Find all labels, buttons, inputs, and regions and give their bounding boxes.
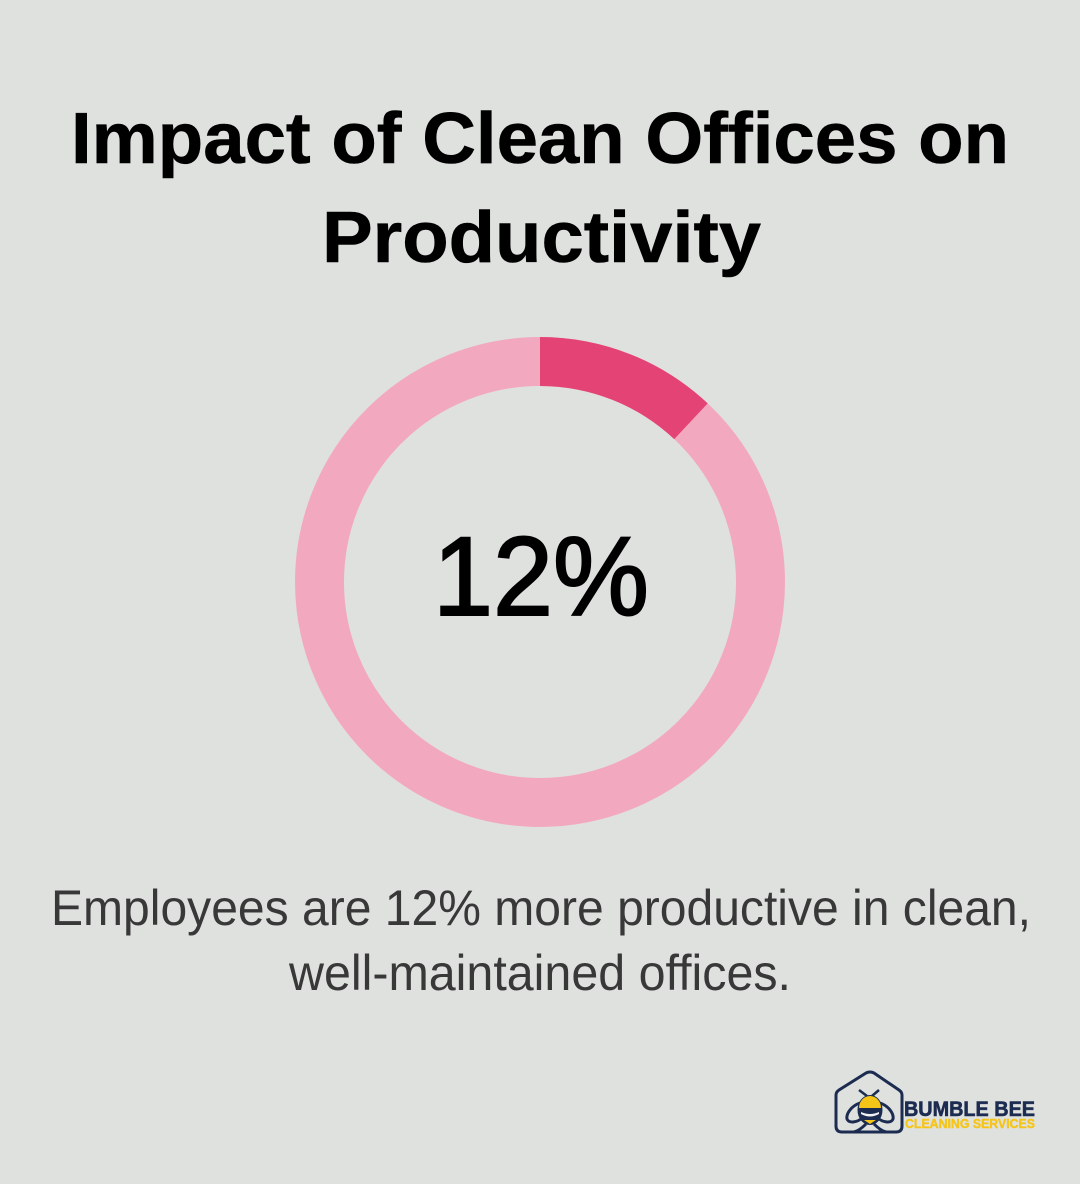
description text: well-maintained offices. — [288, 945, 791, 1001]
brand tagline: CLEANING SERVICES — [905, 1117, 1035, 1131]
logo: Bumble Bee Cleaning Services — [836, 1072, 1035, 1132]
title: Productivity — [322, 198, 761, 278]
title: Impact of Clean Offices on — [71, 99, 1009, 179]
donut value: 12% — [433, 514, 649, 639]
donut chart: 12% — [320, 337, 760, 802]
description text: Employees are 12% more productive in clean, — [51, 880, 1031, 936]
icon: house with bee — [836, 1072, 902, 1132]
description text — [51, 880, 1031, 1001]
brand name: BUMBLE BEE — [904, 1098, 1035, 1121]
title — [71, 99, 1009, 278]
